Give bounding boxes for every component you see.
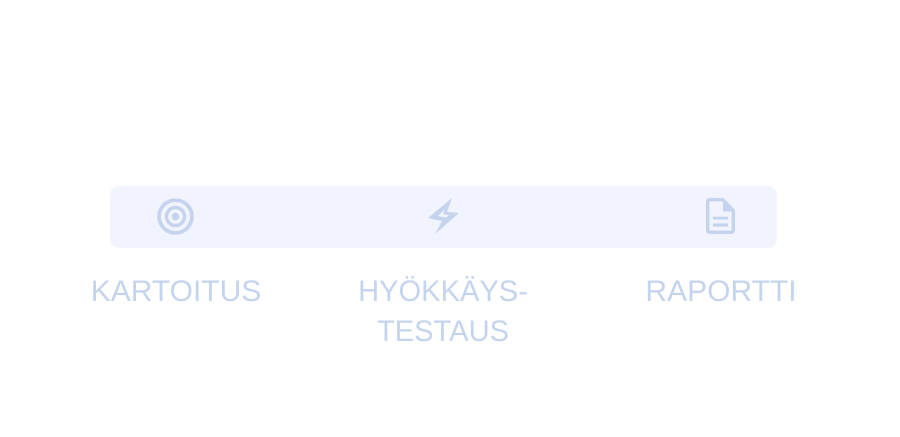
icon: lightning bolt	[428, 198, 459, 234]
icon: target	[157, 198, 194, 235]
label: Hyökkäys-testaus: TESTAUS	[377, 315, 509, 348]
label: Raportti: RAPORTTI	[645, 275, 797, 308]
icon: document	[706, 198, 735, 234]
label: Hyökkäys-testaus: HYÖKKÄYS-	[358, 275, 528, 308]
icon bar panel	[110, 186, 777, 248]
label: Kartoitus: KARTOITUS	[91, 275, 261, 308]
label: Hyökkäys-testaus	[358, 275, 528, 348]
